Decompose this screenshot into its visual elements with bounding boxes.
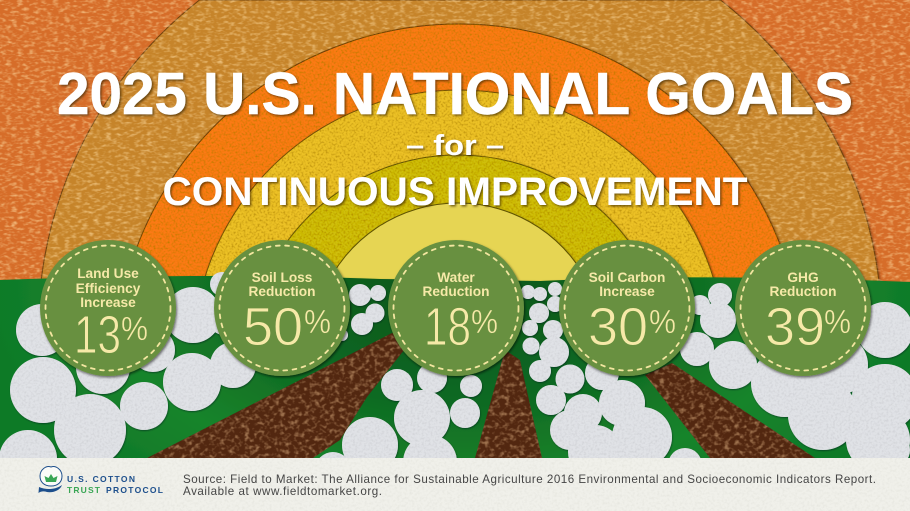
source note: Available at www.fieldtomarket.org. [183,485,382,498]
arc: pale yellow [324,203,592,292]
title line 1: 2025 U.S. NATIONAL GOALS [57,61,853,127]
label: Water [437,270,475,285]
value: % [304,303,331,340]
value: % [824,303,851,340]
label: Land Use [77,266,139,281]
value [243,297,331,357]
label: GHG [787,270,819,285]
label: Reduction [249,284,315,299]
arc: orange [124,24,794,292]
wordmark: PROTOCOL [106,485,163,495]
sky background with nested arcs [0,0,910,292]
title line 3: CONTINUOUS IMPROVEMENT [162,170,748,214]
wordmark: TRUST [67,485,101,495]
badge: soil loss [214,240,350,376]
canvas texture on outer sky [0,0,910,292]
value: 30 [588,297,648,357]
field ground [0,276,910,460]
footer band [0,458,910,511]
title [57,61,853,214]
icon: cotton boll [38,467,62,493]
value: 39 [765,297,825,357]
arc: olive [260,155,656,292]
wordmark [67,474,163,495]
label: Efficiency [76,281,141,296]
brown soil rows [140,330,820,460]
value: 50 [243,297,303,357]
title line 2: – for – [406,130,504,162]
source note: Source: Field to Market: The Alliance for Sustainable Agriculture 2016 Environmental and Socioeconomic Indicators Report. [183,473,876,486]
badge: soil carbon [559,240,695,376]
value: % [649,303,676,340]
label: Reduction [770,284,836,299]
logo: U.S. Cotton Trust Protocol [38,467,163,495]
label: Increase [80,295,136,310]
label: Soil Loss [252,270,313,285]
footer linen texture [0,458,910,511]
soil texture [140,330,820,460]
label: Soil Carbon [589,270,665,285]
value: % [121,310,148,347]
badge: water [388,240,524,376]
value: 13 [74,305,121,365]
wordmark: U.S. COTTON [67,474,135,484]
arc: outer tan [40,0,880,292]
value [765,297,851,357]
label: Reduction [423,284,489,299]
value: 18 [424,297,471,357]
cotton bolls [0,272,910,458]
arc: gold [201,90,717,292]
badge: ghg [735,240,871,376]
badge: land use [40,240,176,376]
label: Increase [599,284,655,299]
value: % [471,303,498,340]
value [588,297,676,357]
